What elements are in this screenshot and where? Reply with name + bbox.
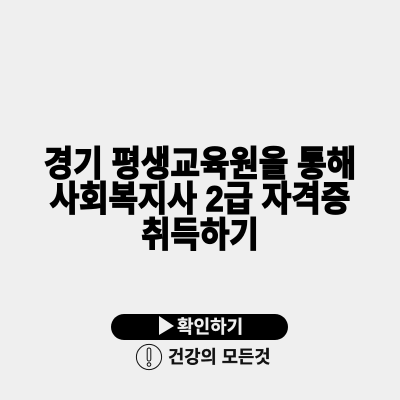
footer brand xyxy=(136,344,271,370)
icon: exclamation circle xyxy=(136,344,162,370)
button: 확인하기 xyxy=(111,314,288,340)
title: 취득하기 xyxy=(141,215,259,255)
icon: play triangle xyxy=(159,316,174,335)
title: 경기 평생교육원을 통해 xyxy=(44,144,356,184)
title xyxy=(44,144,356,255)
title: 사회복지사 2급 자격증 xyxy=(50,179,350,219)
brand name: 건강의 모든것 xyxy=(168,347,271,367)
button label: 확인하기 xyxy=(177,317,243,337)
